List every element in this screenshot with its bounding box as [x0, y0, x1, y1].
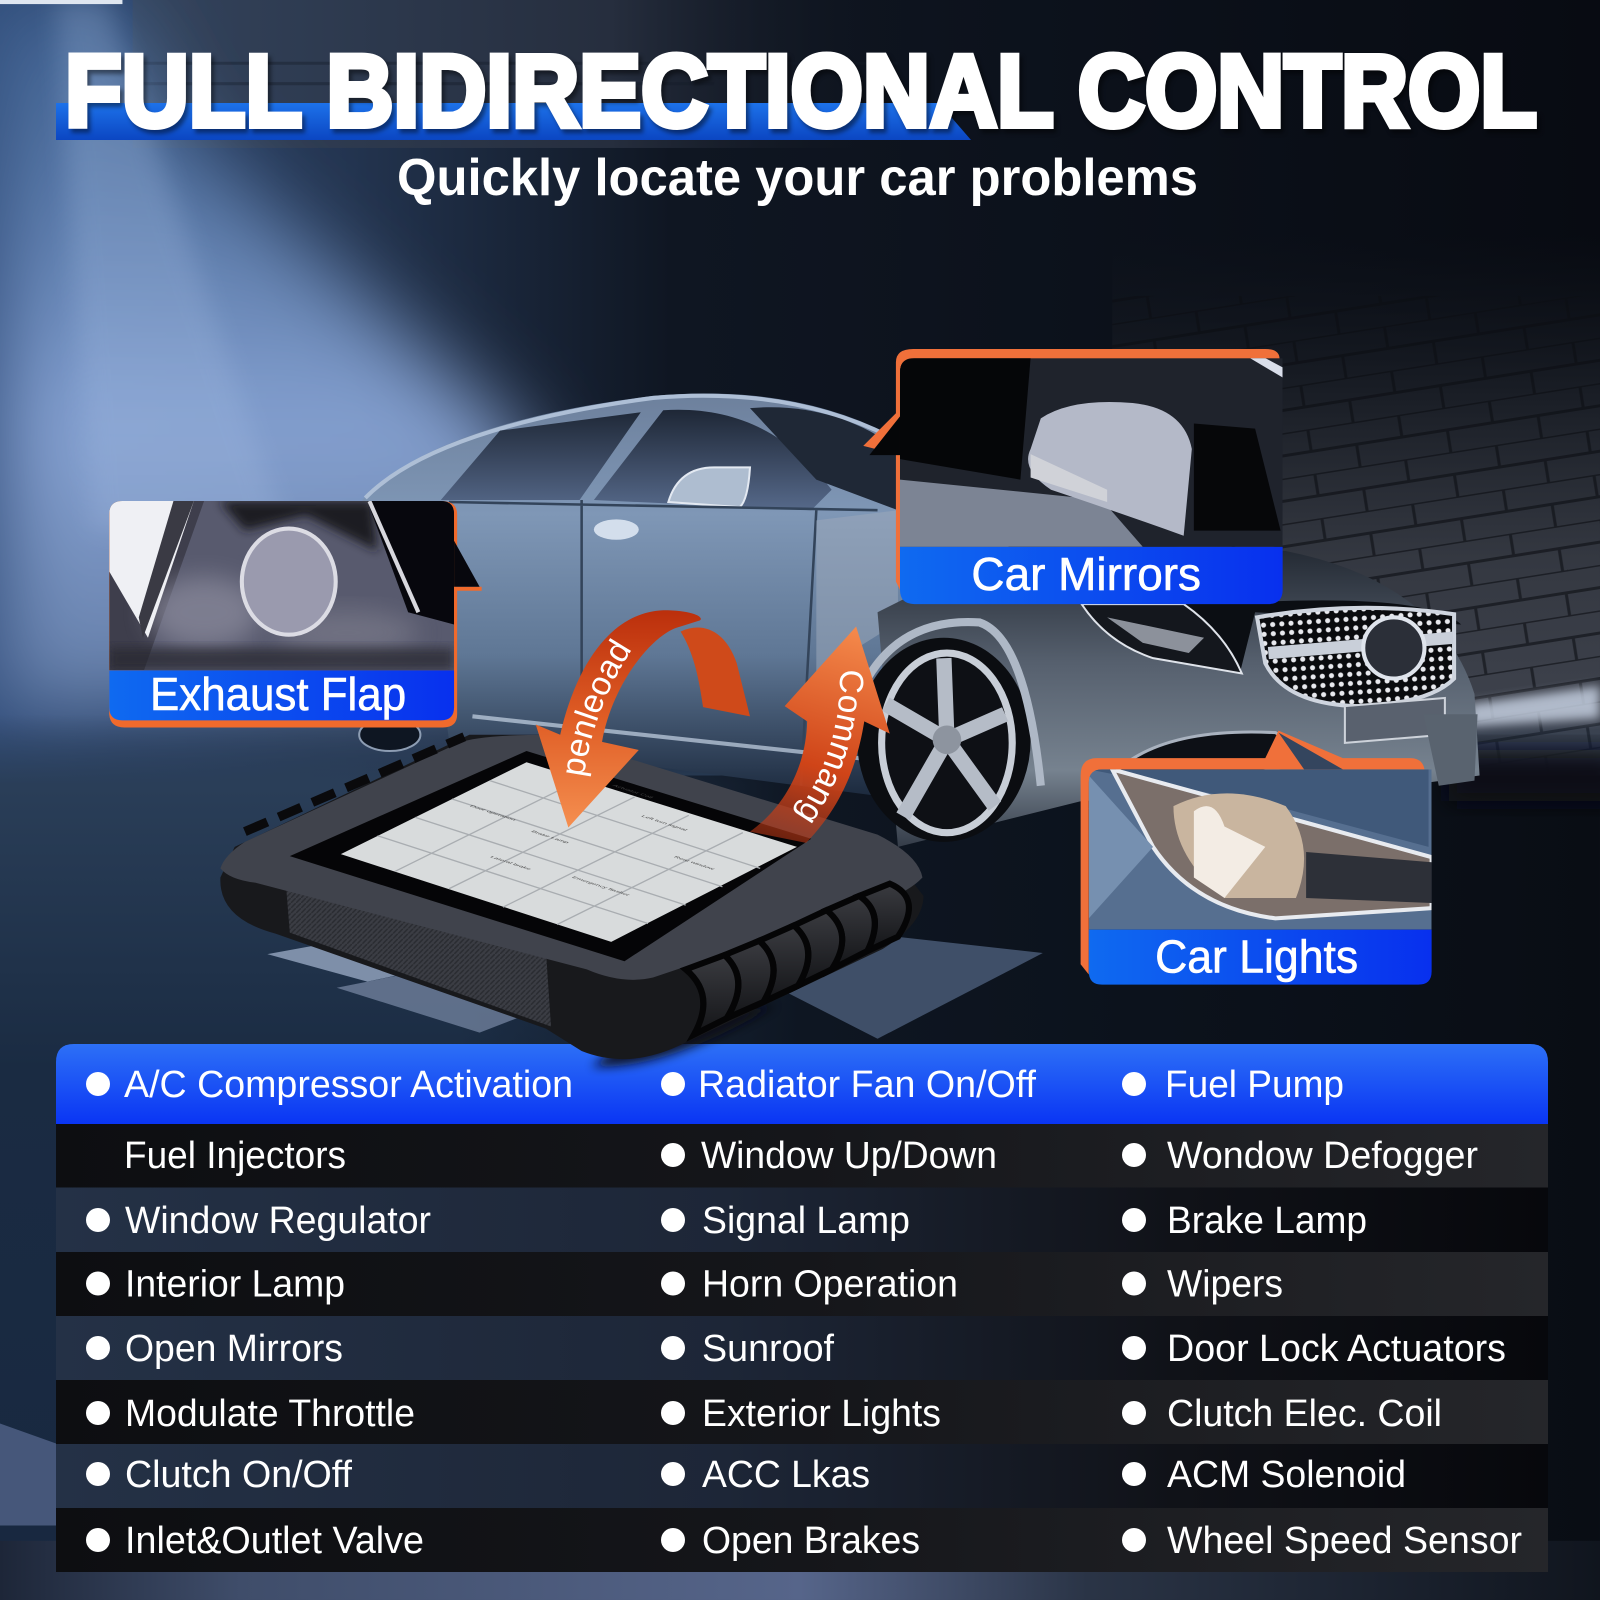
- row: clutch on/off: [56, 1444, 1548, 1508]
- car illustration: [359, 394, 1480, 847]
- row: modulate throttle: [56, 1380, 1548, 1444]
- feature table: [56, 1044, 1548, 1572]
- row: interior lamp: Interior Lamp: [125, 1264, 345, 1306]
- title banner stripe: [56, 103, 971, 140]
- car mirrors callout: Car Mirrors: [971, 548, 1201, 600]
- table header row: [56, 1044, 1548, 1124]
- row: open mirrors: Sunroof: [702, 1328, 834, 1370]
- tablet screen: Emergency flasher: [570, 876, 631, 897]
- row: window regulator: Window Regulator: [125, 1200, 431, 1242]
- row: open mirrors: Door Lock Actuators: [1167, 1328, 1506, 1370]
- arrow: payload from car to tablet: [536, 610, 750, 828]
- tablet screen: Actuator Coil: [611, 784, 654, 799]
- row: window regulator: Brake Lamp: [1167, 1200, 1367, 1242]
- arrow: command from tablet to car: Commang: [794, 671, 864, 824]
- row: interior lamp: Horn Operation: [702, 1264, 958, 1306]
- car windows: [441, 410, 832, 510]
- row: fuel injectors: Fuel Injectors: [124, 1135, 346, 1177]
- row: modulate throttle: Exterior Lights: [702, 1393, 941, 1435]
- car lights callout: Car Lights: [1155, 930, 1358, 982]
- row: fuel injectors: Window Up/Down: [701, 1135, 997, 1177]
- tablet bezel: [290, 751, 811, 961]
- exhaust flap callout: Exhaust Flap: [150, 668, 406, 720]
- arrow: payload from car to tablet: penleoad: [566, 638, 631, 776]
- rear wheel hint: [359, 718, 420, 751]
- roof chrome line: [365, 396, 898, 498]
- tablet side ribs: [686, 884, 909, 1035]
- headlight: [1082, 604, 1242, 673]
- grille emblem: [1363, 617, 1424, 679]
- arrow: command from tablet to car: [750, 626, 890, 843]
- tablet screen: Left turn signal: [639, 815, 688, 831]
- scan tablet device: [220, 735, 923, 1067]
- subtitle: Quickly locate your car problems: [397, 149, 1198, 207]
- mirrors label bar: [900, 547, 1283, 604]
- row: modulate throttle: Modulate Throttle: [125, 1393, 415, 1435]
- mirror pointer: [869, 416, 900, 455]
- row: window regulator: Signal Lamp: [702, 1200, 910, 1242]
- row: open mirrors: Open Mirrors: [125, 1328, 343, 1370]
- exhaust label bar: [109, 670, 454, 720]
- row: open mirrors: [56, 1316, 1548, 1380]
- row: clutch on/off: Clutch On/Off: [125, 1454, 352, 1496]
- car hood and front: [878, 541, 1480, 847]
- tablet screen: Brake Lamp: [529, 830, 571, 844]
- exhaust pointer: [454, 541, 480, 587]
- exhaust flap callout: [109, 501, 482, 728]
- row: clutch on/off: ACC Lkas: [702, 1454, 870, 1496]
- license plate: [1345, 698, 1445, 743]
- car lights callout: [1081, 731, 1432, 985]
- row: modulate throttle: Clutch Elec. Coil: [1167, 1393, 1442, 1435]
- row: fuel injectors: Wondow Defogger: [1167, 1135, 1478, 1177]
- grille: [1257, 608, 1454, 706]
- lights label bar: [1089, 930, 1432, 985]
- lights pointer: [1279, 733, 1343, 769]
- tablet screen: [341, 762, 797, 942]
- row: inlet and outlet valve: Wheel Speed Sensor: [1167, 1520, 1522, 1562]
- table header row: Fuel Pump: [1165, 1064, 1344, 1106]
- bumper vent: [1092, 732, 1316, 806]
- car body side: [362, 394, 1112, 796]
- row: fuel injectors: [56, 1124, 1548, 1188]
- car windshield: [750, 407, 898, 510]
- row: inlet and outlet valve: [56, 1508, 1548, 1572]
- row: interior lamp: Wipers: [1167, 1264, 1283, 1306]
- exhaust photo: [109, 501, 454, 673]
- car mirrors callout: [863, 349, 1283, 604]
- tablet screen: Lateral brake: [488, 856, 533, 871]
- row: interior lamp: [56, 1252, 1548, 1316]
- row: window regulator: [56, 1188, 1548, 1252]
- tablet screen: Door operation: [468, 805, 517, 821]
- tablet screen: Rear window: [672, 856, 716, 871]
- textured side panel: [286, 882, 551, 1027]
- tablet grey frame: [220, 735, 922, 980]
- table header row: A/C Compressor Activation: [124, 1064, 573, 1106]
- door handle: [594, 519, 639, 540]
- door mirror: [668, 467, 750, 507]
- mirror photo: [900, 358, 1283, 547]
- headlight photo: [1089, 769, 1432, 930]
- table header row: Radiator Fan On/Off: [698, 1064, 1036, 1106]
- row: clutch on/off: ACM Solenoid: [1167, 1454, 1406, 1496]
- tablet rubber body: [220, 735, 923, 1059]
- row: inlet and outlet valve: Inlet&Outlet Valve: [125, 1520, 424, 1562]
- row: inlet and outlet valve: Open Brakes: [702, 1520, 920, 1562]
- front wheel: [857, 622, 1041, 842]
